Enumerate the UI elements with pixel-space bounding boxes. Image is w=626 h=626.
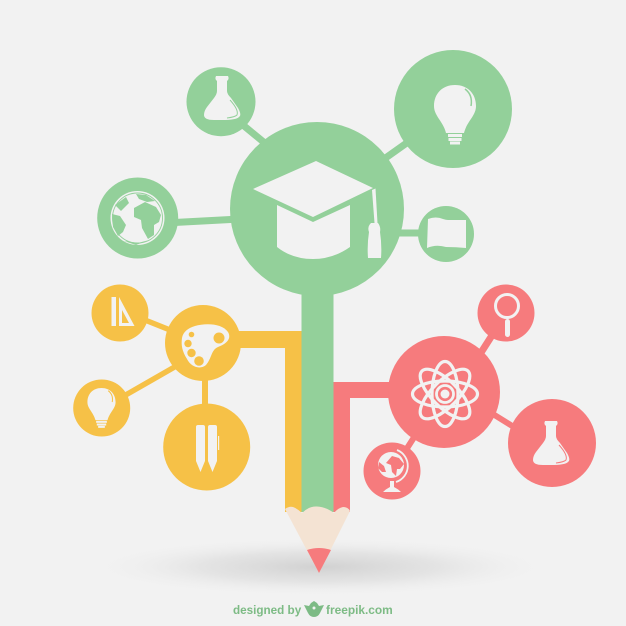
node: light bulb circle	[394, 50, 512, 168]
red pencil band	[333, 382, 400, 512]
icon: paint palette	[182, 324, 229, 367]
node: atom circle	[388, 336, 500, 448]
node: earth circle	[97, 178, 178, 258]
icon: flask	[533, 421, 569, 465]
yellow pencil band	[190, 331, 302, 512]
connectors: yellow	[110, 316, 205, 415]
panel: red science branch	[333, 284, 596, 512]
pencil tip	[285, 506, 350, 573]
icon: small light bulb	[87, 388, 116, 428]
panel: yellow art branch	[73, 284, 302, 512]
pencil shadow	[85, 537, 555, 597]
icon: ruler and set square	[112, 297, 134, 326]
node: ruler circle	[92, 284, 148, 342]
connectors: green	[165, 116, 430, 233]
icon: magnifying glass	[496, 294, 518, 337]
icon: desk globe	[378, 450, 408, 492]
node: book circle	[418, 206, 474, 262]
node: main graduation circle	[230, 122, 404, 296]
panel: green education branch	[97, 50, 512, 512]
node: flask circle	[508, 399, 596, 487]
icon: flask	[204, 76, 240, 120]
icon: earth globe	[110, 191, 164, 245]
node: globe on stand circle	[364, 442, 420, 500]
node: magnifier circle	[478, 284, 534, 342]
node: pens circle	[163, 404, 250, 490]
icon: two pens	[196, 425, 219, 472]
credit text left: designed by	[233, 604, 302, 617]
lead tip	[307, 548, 331, 573]
node: palette circle	[165, 305, 241, 381]
icon: atom	[412, 362, 478, 426]
credit text right: freepik.com	[326, 603, 393, 617]
freepik credit	[233, 601, 393, 617]
icon: open book	[427, 218, 466, 248]
icon: freepik crown	[304, 601, 324, 617]
icon: light bulb	[434, 85, 476, 144]
icon: graduation cap	[253, 161, 381, 259]
node: small bulb circle	[73, 380, 130, 436]
wood cone	[285, 506, 350, 573]
node: flask circle	[186, 67, 256, 136]
green pencil stem	[302, 280, 334, 512]
connectors: red	[397, 326, 530, 464]
